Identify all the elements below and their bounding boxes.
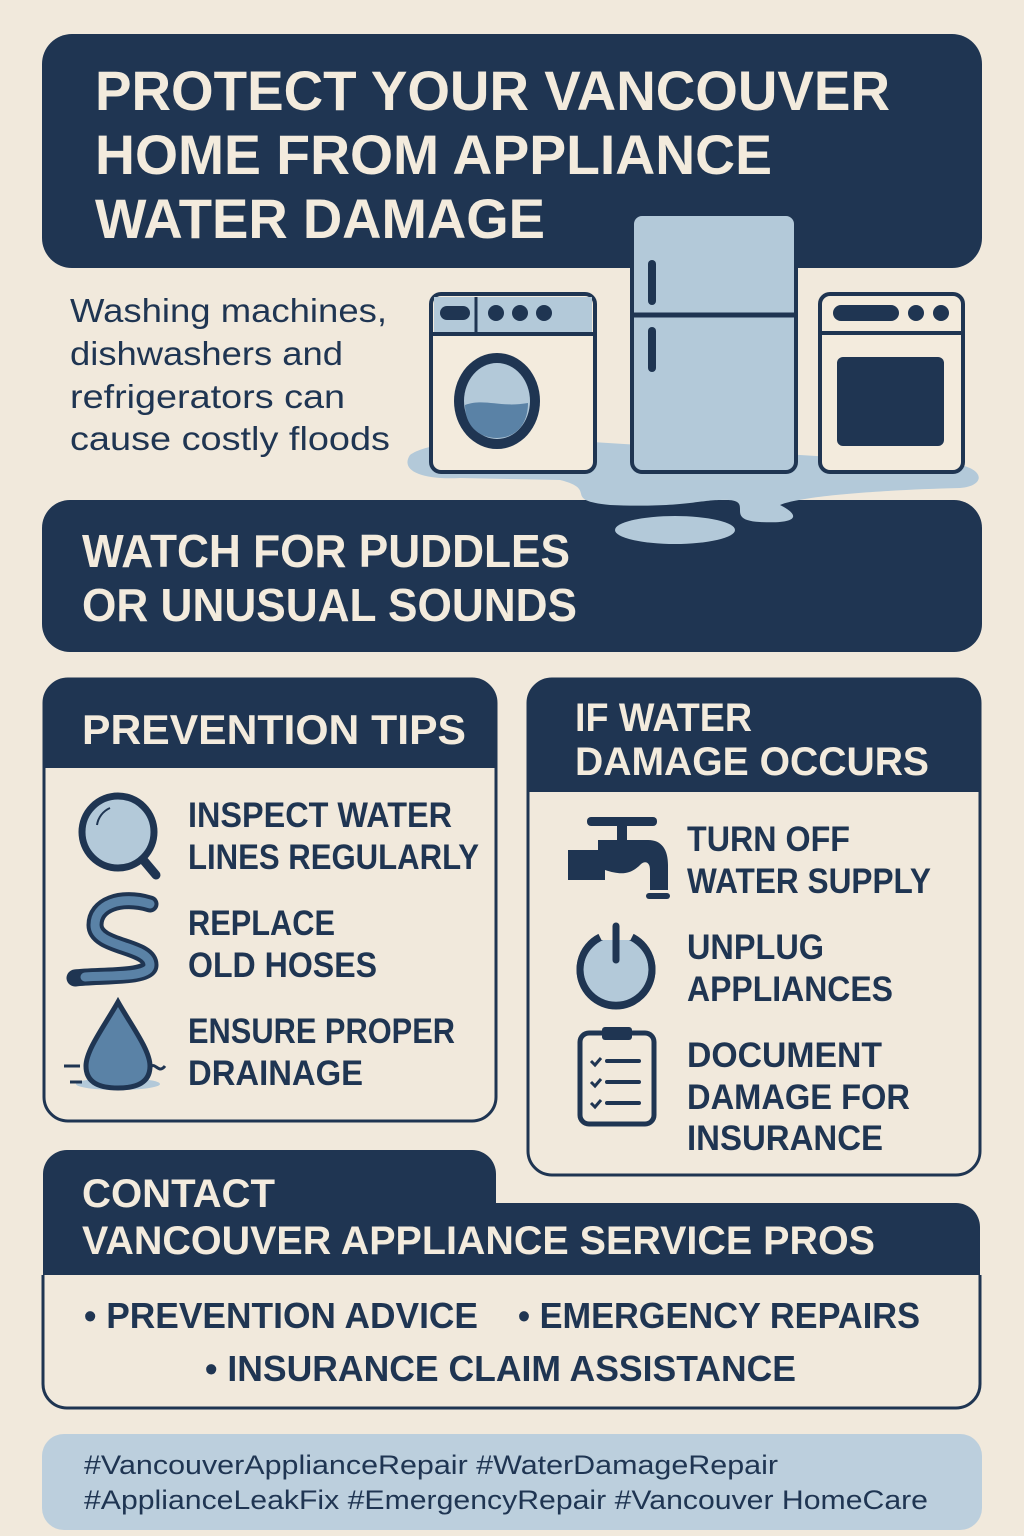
washer [431,294,595,472]
watch panel: WATCH FOR PUDDLES [82,525,570,577]
step: turn off: WATER SUPPLY [687,862,931,901]
intro text [70,292,390,457]
services list: • INSURANCE CLAIM ASSISTANCE [205,1348,796,1389]
fridge [632,214,796,472]
puddle [407,439,979,522]
tip: inspect [188,796,479,877]
services list: • PREVENTION ADVICE [84,1295,478,1336]
oven [820,294,963,472]
services list [84,1295,920,1389]
tip: inspect: INSPECT WATER [188,796,452,835]
step: turn off [687,820,931,901]
panel: prevention tips [44,679,496,1121]
intro text: refrigerators can [70,378,345,415]
hashtags box: #ApplianceLeakFix #EmergencyRepair #Vancouver HomeCare [84,1485,928,1515]
icon: water drop [64,1002,165,1090]
icon: power [579,920,653,1006]
tip: hoses: REPLACE [188,904,335,943]
services list: • EMERGENCY REPAIRS [518,1295,920,1336]
step: unplug [687,928,893,1009]
tip: drainage: ENSURE PROPER [188,1012,455,1051]
watch panel: OR UNUSUAL SOUNDS [82,579,577,631]
tip: hoses: OLD HOSES [188,946,377,985]
panel: contact: CONTACT [82,1172,275,1216]
panel: contact [43,1150,980,1408]
tip: inspect: LINES REGULARLY [188,838,479,877]
tip: hoses [188,904,377,985]
panel: prevention tips: PREVENTION TIPS [82,706,466,753]
intro text: cause costly floods [70,420,390,457]
panel: if water damage occurs [528,679,980,1175]
step: unplug: UNPLUG [687,928,824,967]
illustration: appliances with puddle [407,214,979,544]
icon: magnifier [82,796,156,875]
hashtags box [42,1434,982,1530]
icon: hose [75,901,150,978]
panel: contact: VANCOUVER APPLIANCE SERVICE PROS [82,1219,875,1263]
title panel: HOME FROM APPLIANCE [95,123,772,186]
intro text: dishwashers and [70,335,343,372]
title panel: PROTECT YOUR VANCOUVER [95,59,890,122]
panel: if water damage occurs: IF WATER [575,696,752,740]
intro text: Washing machines, [70,292,387,329]
hashtags box: #VancouverApplianceRepair #WaterDamageRepair [84,1450,778,1480]
step: unplug: APPLIANCES [687,970,893,1009]
tip: drainage: DRAINAGE [188,1054,363,1093]
panel: if water damage occurs: DAMAGE OCCURS [575,740,929,784]
tip: drainage [188,1012,455,1093]
icon: faucet [568,817,670,899]
step: turn off: TURN OFF [687,820,850,859]
step: document [687,1036,910,1158]
step: document: DAMAGE FOR [687,1078,910,1117]
step: document: DOCUMENT [687,1036,882,1075]
watch panel [42,500,982,652]
icon: clipboard [580,1027,654,1124]
title panel: WATER DAMAGE [95,187,545,250]
step: document: INSURANCE [687,1119,883,1158]
title panel [42,34,982,268]
